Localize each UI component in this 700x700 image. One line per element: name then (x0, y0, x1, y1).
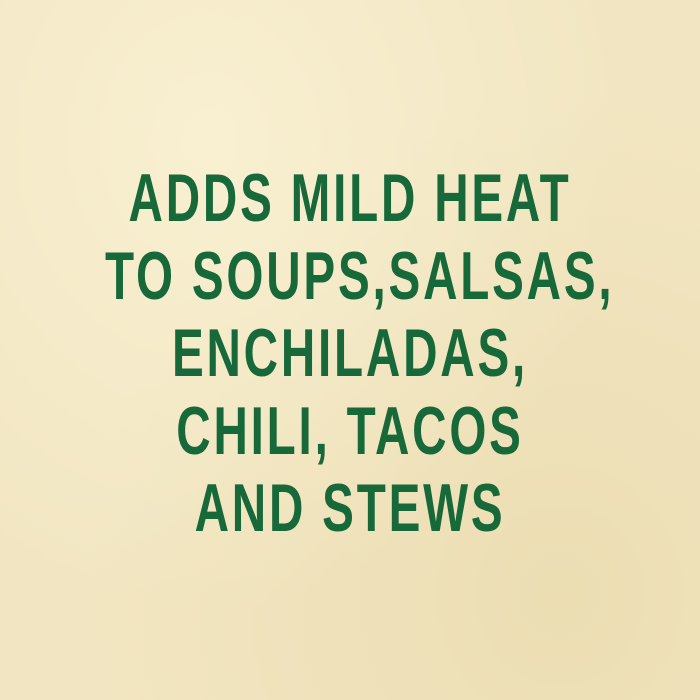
main text block: AND STEWS (195, 470, 505, 546)
main text block (105, 160, 614, 546)
main text block: CHILI, TACOS (176, 392, 524, 468)
main text block: ENCHILADAS, (172, 315, 528, 391)
main text block: ADDS MILD HEAT (129, 160, 571, 236)
main text block: TO SOUPS,SALSAS, (105, 238, 614, 314)
